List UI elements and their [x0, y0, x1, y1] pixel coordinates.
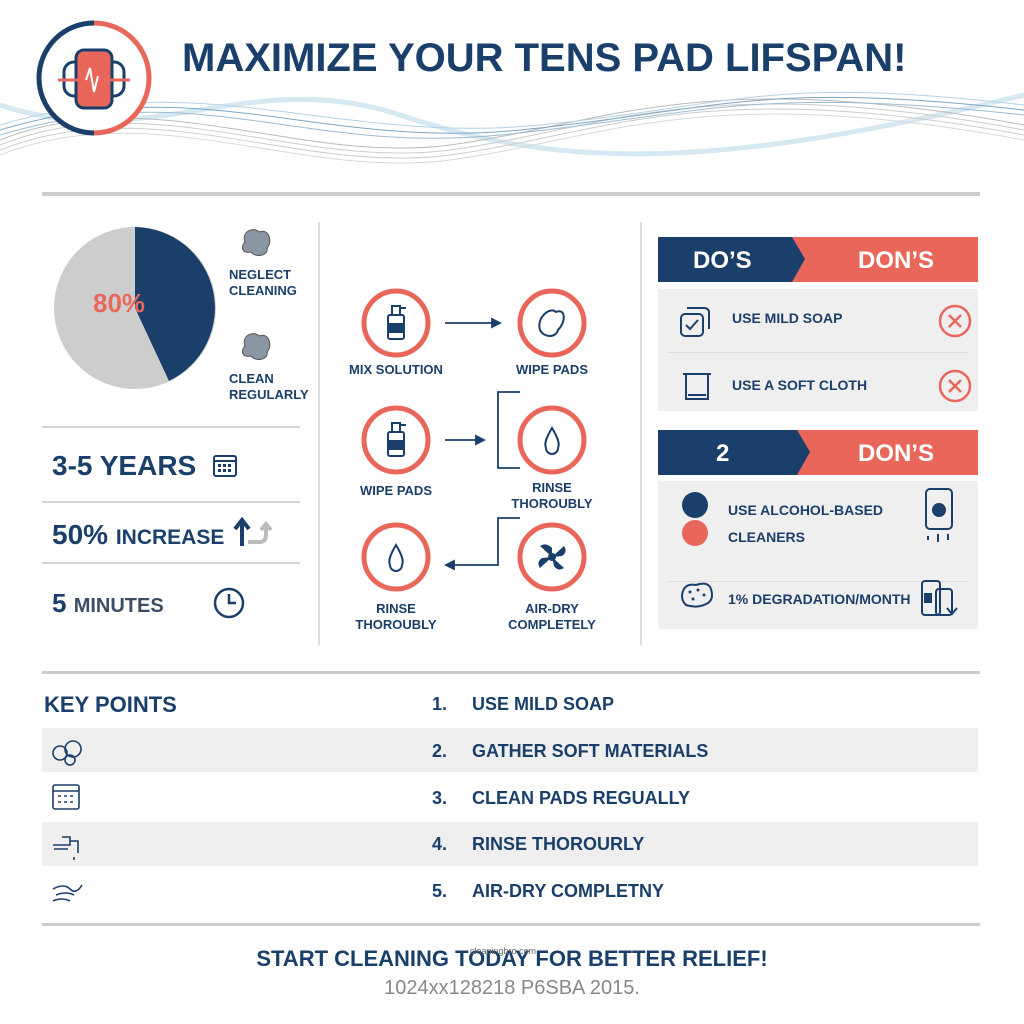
panel: stats	[42, 227, 309, 618]
key points list: CLEAN PADS REGUALLY	[472, 788, 690, 808]
header 1: DO’S	[693, 247, 752, 274]
footer: START CLEANING TODAY FOR BETTER RELIEF!	[256, 946, 768, 971]
heading: key points: KEY POINTS	[44, 692, 177, 717]
legend: neglect	[229, 229, 297, 298]
key points list: 5.	[432, 881, 447, 901]
panel: cleaning steps: THOROUBLY	[355, 617, 437, 632]
key points list: GATHER SOFT MATERIALS	[472, 741, 708, 761]
legend: clean	[229, 333, 309, 402]
header 2	[658, 430, 978, 475]
box 2: USE ALCOHOL-BASED	[728, 502, 883, 518]
step labels: MIX SOLUTION	[349, 362, 443, 377]
pie chart	[54, 227, 216, 389]
pie chart: 80%	[93, 288, 145, 318]
header 2: 2	[716, 440, 729, 467]
box 1	[658, 289, 978, 411]
legend: clean: REGULARLY	[229, 387, 309, 402]
stat: years: 3-5 YEARS	[52, 450, 196, 481]
key points list: 4.	[432, 834, 447, 854]
key points list: AIR-DRY COMPLETNY	[472, 881, 664, 901]
box 1: USE A SOFT CLOTH	[732, 377, 867, 393]
panel: cleaning steps: RINSE	[532, 480, 572, 495]
box 2: 1% DEGRADATION/MONTH	[728, 591, 911, 607]
key points list	[432, 694, 708, 901]
background waves	[0, 92, 1024, 164]
panel: cleaning steps: AIR-DRY	[525, 601, 579, 616]
key points bands	[42, 728, 978, 772]
legend: neglect: NEGLECT	[229, 267, 291, 282]
key point icons	[52, 740, 83, 902]
panel: dos and donts	[658, 237, 978, 629]
panel: cleaning steps: THOROUBLY	[511, 496, 593, 511]
stat: minutes: 5 MINUTES	[52, 588, 164, 618]
text: cleaningbro.com	[470, 946, 536, 956]
text: 1024xx128218 P6SBA 2015.	[384, 977, 640, 999]
panel: cleaning steps: WIPE PADS	[360, 483, 432, 498]
key points list: 3.	[432, 788, 447, 808]
title: MAXIMIZE YOUR TENS PAD LIFSPAN!	[182, 36, 906, 80]
key points list: 1.	[432, 694, 447, 714]
header 2: DON’S	[858, 440, 934, 467]
legend: clean: CLEAN	[229, 371, 274, 386]
panel: cleaning steps: WIPE PADS	[516, 362, 588, 377]
arrows	[445, 319, 520, 569]
key points list: 2.	[432, 741, 447, 761]
panel: cleaning steps	[349, 288, 596, 632]
logo	[36, 20, 152, 136]
step icons	[362, 288, 586, 592]
stat: increase: 50% INCREASE	[52, 519, 224, 550]
panel: cleaning steps: RINSE	[376, 601, 416, 616]
box 2	[658, 481, 978, 629]
icon: clock	[214, 588, 244, 618]
box 2: CLEANERS	[728, 529, 805, 545]
header 1: DON’S	[858, 247, 934, 274]
key points list: RINSE THOROURLY	[472, 834, 644, 854]
panel: cleaning steps: COMPLETELY	[508, 617, 596, 632]
legend: neglect: CLEANING	[229, 283, 297, 298]
box 1: USE MILD SOAP	[732, 310, 842, 326]
key points list: USE MILD SOAP	[472, 694, 614, 714]
header 1	[658, 237, 978, 282]
